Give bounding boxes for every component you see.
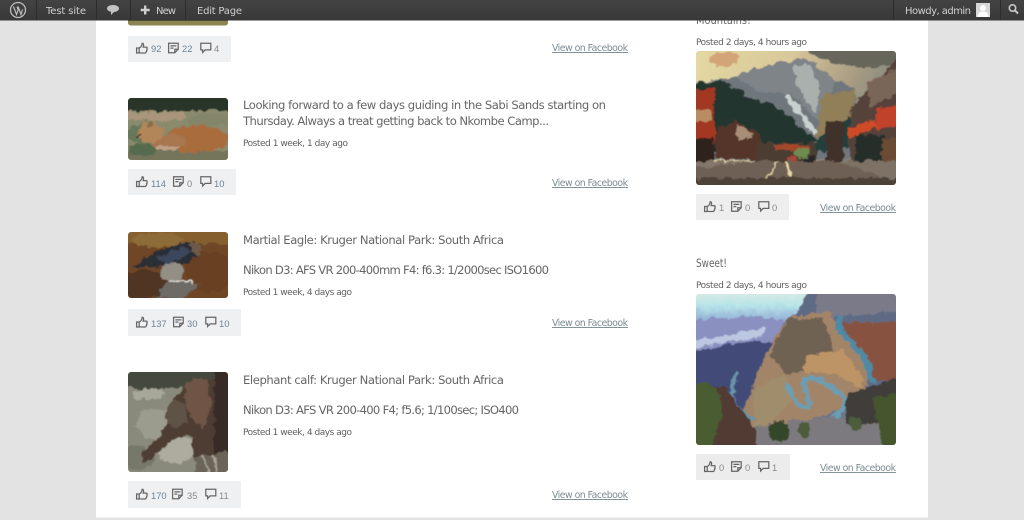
stats bar: 0: [745, 202, 750, 213]
icon: comments bubble: [107, 5, 119, 15]
greeting: Howdy, admin: [905, 6, 971, 17]
stats bar: [128, 309, 241, 336]
timestamp: Posted 1 week, 4 days ago: [243, 428, 352, 438]
icon: wordpress logo: [10, 2, 26, 18]
post text: [243, 233, 549, 277]
timestamp: Posted 2 days, 4 hours ago: [696, 38, 807, 48]
stats bar: 170: [151, 490, 167, 501]
post text: [242, 98, 606, 128]
stats bar: 10: [219, 318, 229, 329]
photo: martial eagle: [128, 232, 228, 298]
new link: New: [156, 6, 176, 17]
post: mountains: [696, 20, 896, 220]
facebook link: View on Facebook: [552, 490, 629, 501]
stats bar: [128, 36, 231, 62]
stats bar: 0: [772, 202, 777, 213]
post text: Nikon D3: AFS VR 200-400 F4; f5.6; 1/100sec; ISO400: [243, 403, 519, 417]
post text: Sweet!: [696, 256, 727, 270]
post 2: lion: [120, 90, 629, 195]
post text: [243, 373, 519, 417]
stats bar: 11: [219, 490, 229, 501]
stats bar: 0: [187, 178, 192, 189]
left feed column: [116, 10, 629, 508]
stats bar: 35: [187, 490, 197, 501]
stats bar: 137: [151, 318, 167, 329]
stats bar: 4: [214, 43, 219, 54]
stats bar: 10: [214, 178, 224, 189]
facebook link: View on Facebook: [820, 463, 897, 474]
stats bar: [696, 194, 789, 220]
icon: search: [1009, 5, 1018, 14]
photo: elephant calf: [128, 372, 228, 472]
facebook link: View on Facebook: [820, 203, 897, 214]
stats bar: 1: [772, 462, 777, 473]
edit page link: Edit Page: [197, 6, 242, 17]
photo: lion: [128, 98, 228, 160]
post 3: eagle: [116, 224, 629, 336]
post text: Martial Eagle: Kruger National Park: South Africa: [243, 233, 504, 247]
stats bar: [128, 481, 241, 508]
stats bar: 1: [719, 202, 724, 213]
post 4: elephant: [120, 364, 629, 508]
photo: canyon: [696, 294, 896, 445]
post text (cropped): Mountains!: [696, 13, 751, 27]
stats bar: 0: [745, 462, 750, 473]
post text: Elephant calf: Kruger National Park: South Africa: [243, 373, 504, 387]
stats bar: 22: [182, 43, 192, 54]
timestamp: Posted 1 week, 4 days ago: [243, 288, 352, 298]
stats bar: [128, 169, 236, 195]
photo fragment: [128, 20, 228, 26]
right feed column: [696, 20, 896, 480]
post: canyon: [688, 256, 904, 480]
stats bar: 92: [151, 43, 161, 54]
icon: plus: [141, 6, 150, 15]
stats bar: 0: [719, 462, 724, 473]
stats bar: 30: [187, 318, 197, 329]
timestamp: Posted 1 week, 1 day ago: [243, 139, 348, 149]
admin top bar: [0, 0, 1024, 20]
photo: mountain town: [696, 51, 896, 185]
timestamp: Posted 2 days, 4 hours ago: [696, 281, 807, 291]
facebook link: View on Facebook: [552, 178, 629, 189]
facebook link: View on Facebook: [552, 43, 629, 54]
avatar: [976, 3, 990, 17]
stats bar: 114: [151, 178, 166, 189]
post text: Thursday. Always a treat getting back to Nkombe Camp...: [242, 114, 549, 128]
post text: Looking forward to a few days guiding in the Sabi Sands starting on: [243, 98, 606, 112]
post 1 (cropped): [128, 20, 628, 62]
facebook link: View on Facebook: [552, 318, 629, 329]
site name: Test site: [45, 6, 86, 17]
post text: Nikon D3: AFS VR 200-400mm F4: f6.3: 1/2000sec ISO1600: [243, 263, 549, 277]
stats bar: [696, 454, 790, 480]
